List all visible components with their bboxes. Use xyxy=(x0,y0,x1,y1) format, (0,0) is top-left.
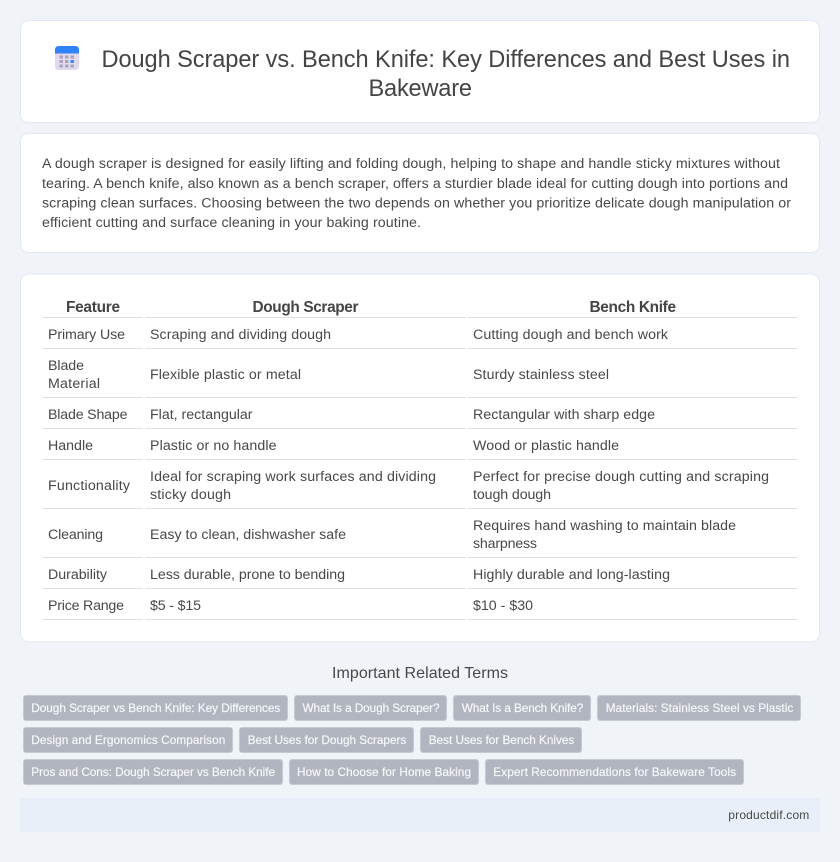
tag xyxy=(420,728,582,752)
tag xyxy=(290,760,478,784)
panel: header xyxy=(20,20,820,122)
row: durability: Less durable, prone to bending xyxy=(150,567,345,583)
tag xyxy=(240,728,414,752)
tag xyxy=(598,696,800,720)
tag: Best Uses for Dough Scrapers xyxy=(248,733,406,747)
table rules xyxy=(43,317,797,620)
tag xyxy=(486,760,744,784)
tag: Expert Recommendations for Bakeware Tools xyxy=(493,765,736,779)
row: blade material xyxy=(48,358,609,392)
row: price range: $5 - $15 xyxy=(150,598,201,614)
heading: important related terms: Important Related Terms xyxy=(332,665,508,682)
row: primary use: Cutting dough and bench work xyxy=(473,327,669,343)
title: Dough Scraper vs. Bench Knife: Key Differences and Best Uses in xyxy=(102,47,790,73)
tag: Pros and Cons: Dough Scraper vs Bench Knife xyxy=(31,765,275,779)
tag xyxy=(294,696,446,720)
icon: calendar xyxy=(55,46,79,70)
tag xyxy=(24,760,282,784)
table header row: Bench Knife xyxy=(590,299,676,316)
row: durability: Highly durable and long-lasting xyxy=(473,567,670,583)
footer bar xyxy=(20,798,820,832)
row: functionality: Perfect for precise dough cutting and scraping xyxy=(473,469,769,485)
row: primary use: Scraping and dividing dough xyxy=(150,327,331,343)
tag: Design and Ergonomics Comparison xyxy=(31,733,225,747)
text block: introduction: tearing. A bench knife, also known as a bench scraper, offers a sturdier blade ideal for cutting dough into portions and xyxy=(42,176,788,192)
tag: How to Choose for Home Baking xyxy=(297,765,471,779)
tag: What Is a Dough Scraper? xyxy=(302,701,440,715)
tag: What Is a Bench Knife? xyxy=(462,701,584,715)
row: functionality xyxy=(48,469,769,503)
row: blade material: Material xyxy=(48,376,100,392)
tag: Materials: Stainless Steel vs Plastic xyxy=(606,701,793,715)
tag xyxy=(24,696,288,720)
row: handle xyxy=(48,438,619,454)
row: durability: Durability xyxy=(48,567,108,583)
footer bar: productdif.com xyxy=(728,808,809,822)
row: handle: Handle xyxy=(48,438,93,454)
row: primary use: Primary Use xyxy=(48,327,125,343)
row: price range xyxy=(48,598,533,614)
title: Bakeware xyxy=(368,76,472,102)
row: functionality: sticky dough xyxy=(150,487,231,503)
row: blade shape: Rectangular with sharp edge xyxy=(473,407,655,423)
row: blade material: Blade xyxy=(48,358,84,374)
row: cleaning xyxy=(48,518,736,552)
row: handle: Wood or plastic handle xyxy=(473,438,619,454)
row: functionality: Ideal for scraping work surfaces and dividing xyxy=(150,469,436,485)
panel: introduction xyxy=(20,134,820,252)
text block: introduction: A dough scraper is designed for easily lifting and folding dough, helping to shape and handle sticky mixtures without xyxy=(42,156,780,172)
row: primary use xyxy=(48,327,669,343)
text block: introduction: efficient cutting and surface cleaning in your baking routine. xyxy=(42,215,421,231)
tag group: related terms xyxy=(24,696,800,784)
table header row: Dough Scraper xyxy=(252,299,358,316)
table header row: Feature xyxy=(66,299,120,316)
row: blade material: Sturdy stainless steel xyxy=(473,367,609,383)
text block: introduction xyxy=(42,156,791,231)
row: price range: $10 - $30 xyxy=(473,598,533,614)
row: blade shape xyxy=(48,407,655,423)
row: functionality: tough dough xyxy=(473,487,551,503)
table header row xyxy=(66,299,676,316)
row: price range: Price Range xyxy=(48,598,124,614)
row: handle: Plastic or no handle xyxy=(150,438,277,454)
row: blade shape: Flat, rectangular xyxy=(150,407,253,423)
row: cleaning: sharpness xyxy=(473,536,537,552)
tag xyxy=(24,728,232,752)
row: cleaning: Cleaning xyxy=(48,527,103,543)
title xyxy=(102,47,790,102)
tag: Dough Scraper vs Bench Knife: Key Differences xyxy=(31,701,280,715)
row: cleaning: Requires hand washing to maintain blade xyxy=(473,518,736,534)
text block: introduction: scraping clean surfaces. Choosing between the two depends on whether you prioritize delicate dough manipulation or xyxy=(42,196,791,212)
row: durability xyxy=(48,567,670,583)
row: functionality: Functionality xyxy=(48,478,131,494)
tag: Best Uses for Bench Knives xyxy=(429,733,574,747)
tag xyxy=(454,696,590,720)
row: blade material: Flexible plastic or metal xyxy=(150,367,301,383)
panel: comparison table xyxy=(20,274,820,642)
row: cleaning: Easy to clean, dishwasher safe xyxy=(150,527,346,543)
row: blade shape: Blade Shape xyxy=(48,407,128,423)
